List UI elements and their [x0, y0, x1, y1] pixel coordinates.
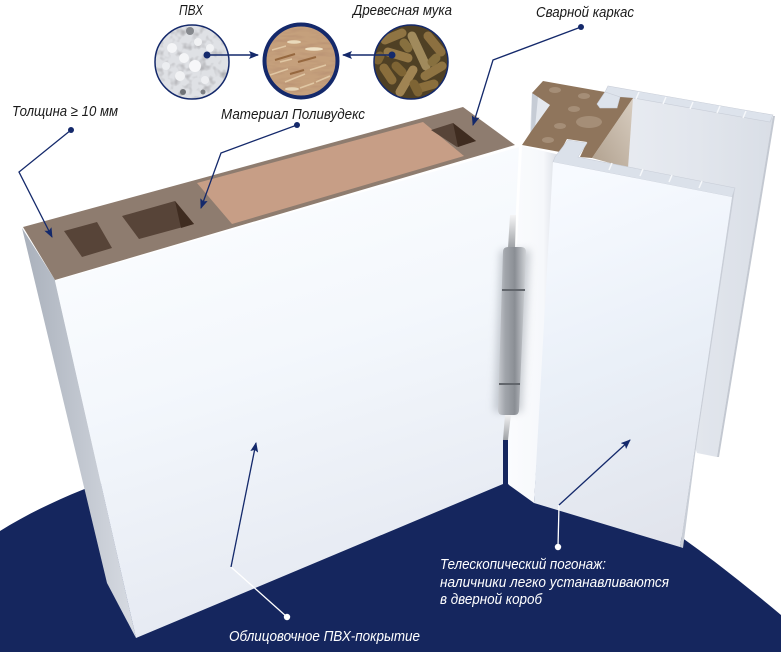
arrow: PVC to material: [204, 52, 258, 58]
label: welded frame: Сварной каркас: [536, 4, 634, 21]
door front face: [55, 147, 519, 638]
trim front face: [534, 162, 732, 547]
frame brown section: [522, 81, 633, 158]
material circle: Polywoodex: [264, 24, 338, 98]
material circle: wood flour: [374, 25, 448, 99]
trim side edge: [680, 188, 735, 548]
arrow: material: [201, 122, 300, 208]
arrow: wood flour to material: [343, 52, 396, 58]
arrow: thickness: [19, 127, 74, 237]
door gap: [503, 440, 508, 485]
door side edge: [22, 228, 136, 638]
frame back white edge: [530, 93, 550, 134]
label: telescopic trim: [440, 556, 669, 608]
label: telescopic trim: в дверной короб: [440, 591, 542, 608]
arrow: PVC coating: [231, 443, 290, 620]
label: material: Материал Поливудекс: [221, 106, 365, 123]
hinge: [494, 215, 530, 440]
material circle: PVC: [155, 25, 229, 99]
label: wood flour: Древесная мука: [351, 2, 452, 19]
door top face: [23, 107, 515, 280]
frame inner wall: [592, 98, 633, 168]
back casing panel: [605, 86, 775, 457]
hollow 1: [64, 222, 112, 257]
hollow 2: [122, 201, 194, 239]
label: telescopic trim: Телескопический погонаж:: [440, 556, 606, 573]
label: PVC: ПВХ: [179, 2, 204, 19]
navy background shape: [0, 429, 781, 652]
polywood section: [197, 122, 464, 224]
door frame assembly: [505, 81, 775, 548]
door leaf: [22, 107, 519, 638]
hollow 3: [431, 123, 476, 147]
label: telescopic trim: наличники легко устанавливаются: [440, 574, 669, 591]
label: PVC coating: Облицовочное ПВХ-покрытие: [229, 628, 420, 645]
arrow: telescopic trim: [555, 440, 630, 550]
label: thickness: Толщина ≥ 10 мм: [12, 103, 118, 120]
trim ribs: [553, 92, 735, 197]
frame white body: [505, 146, 560, 503]
arrow: welded frame: [473, 24, 584, 125]
